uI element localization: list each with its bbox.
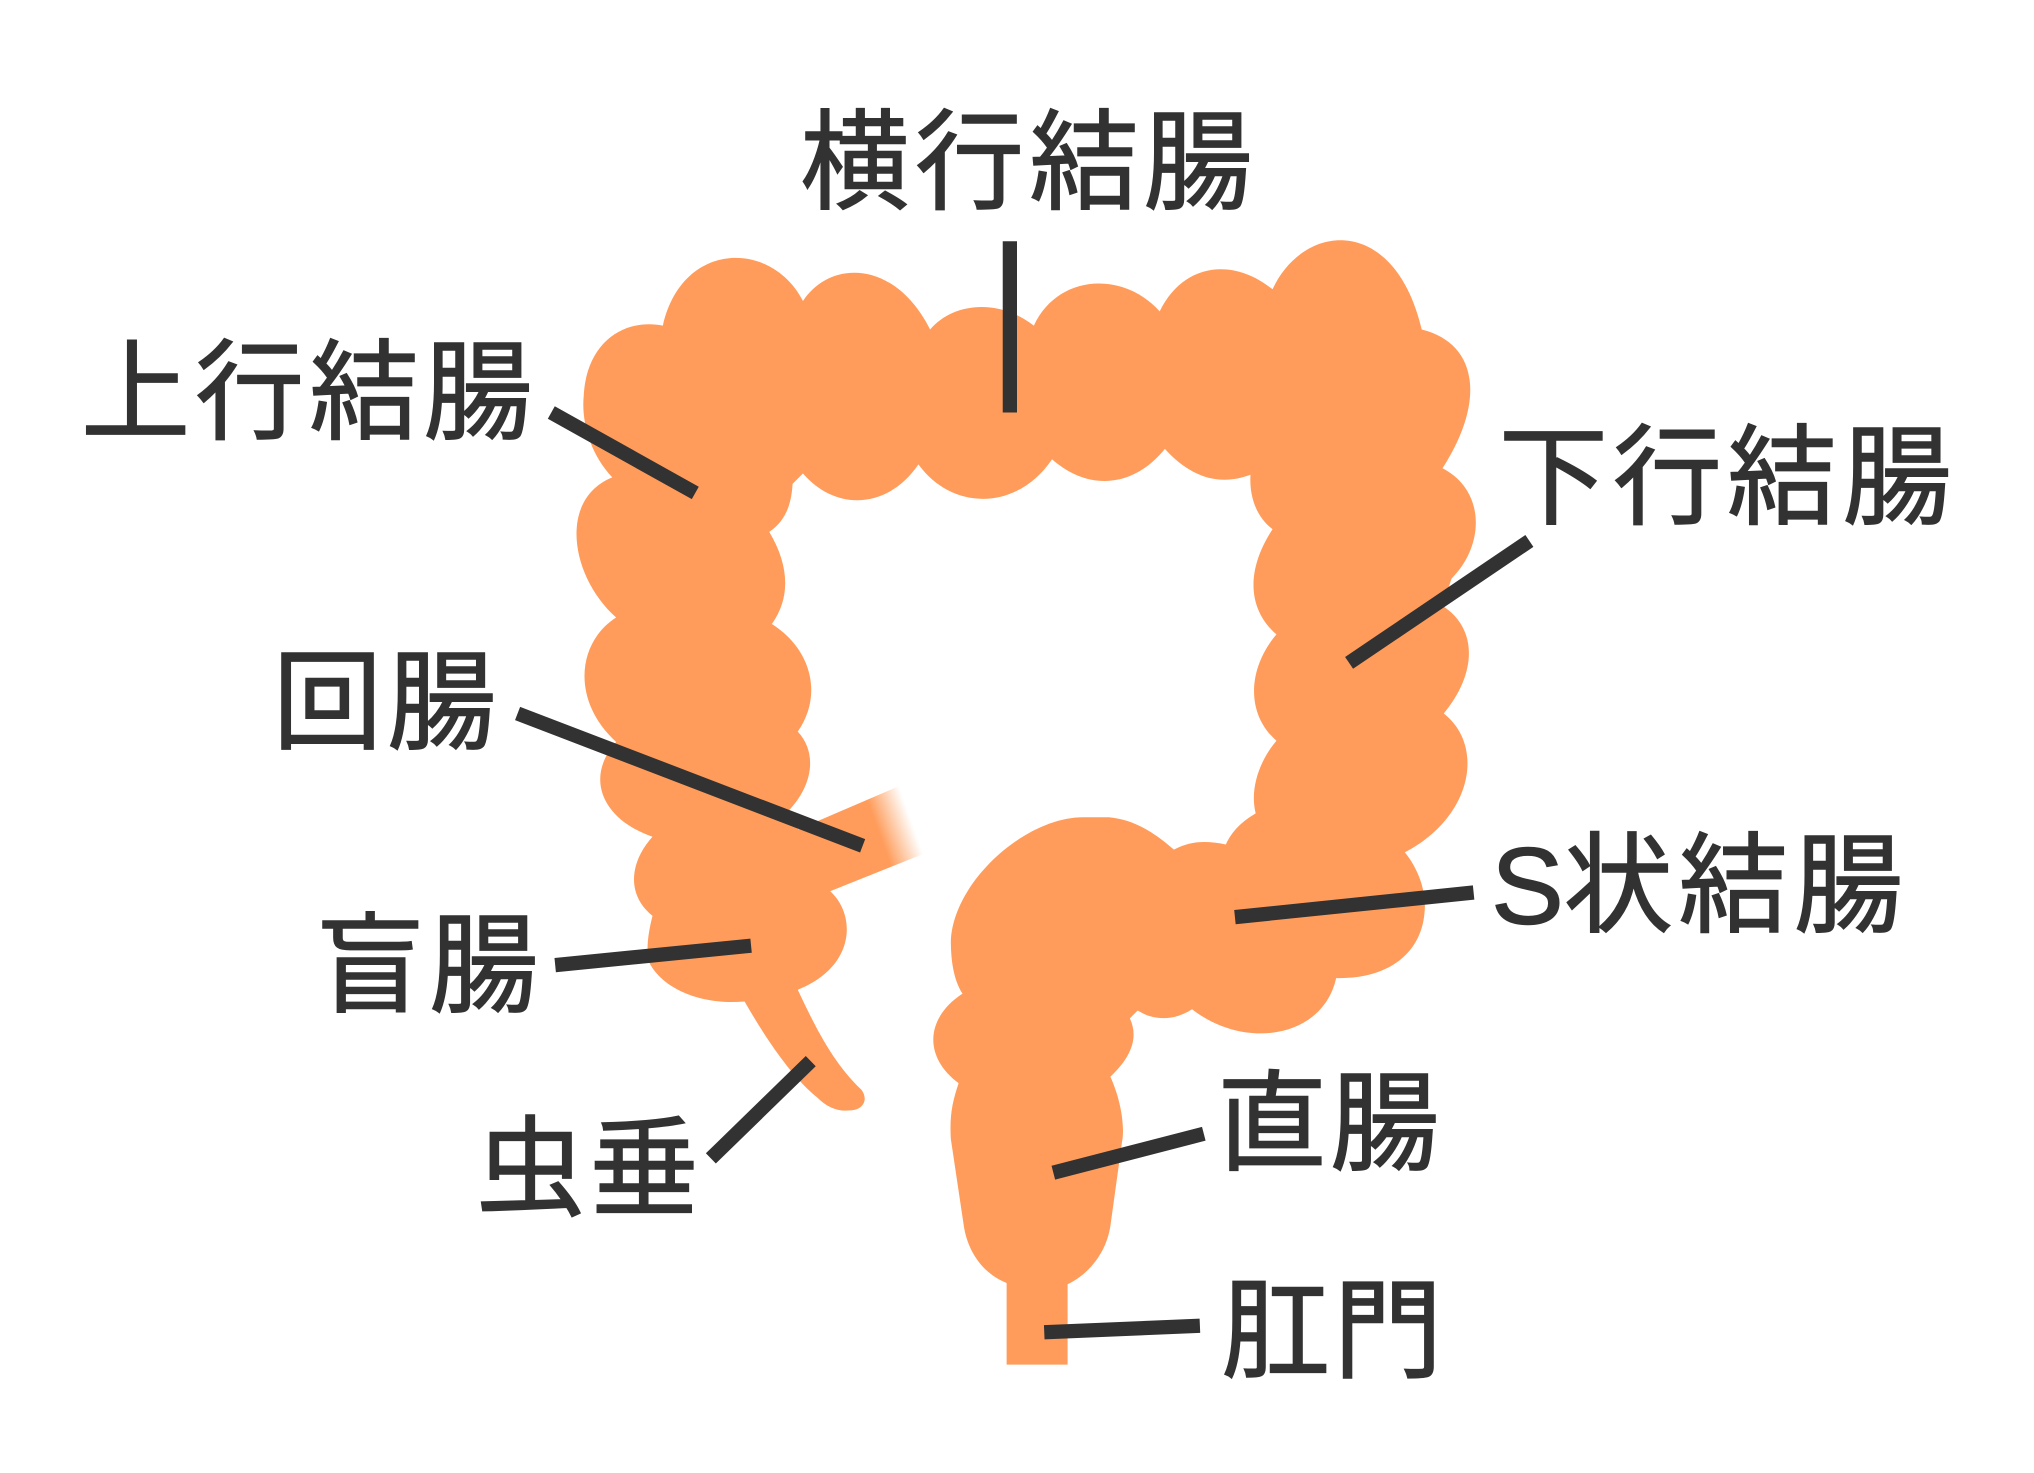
- label: ascending colon: [81, 333, 695, 493]
- label: rectum: 直腸: [1217, 1064, 1439, 1186]
- colon body: [577, 240, 1476, 1365]
- ileum tube: [778, 782, 940, 902]
- label: sigmoid colon: S状結腸: [1491, 826, 1903, 948]
- label: descending colon: [1349, 418, 1952, 663]
- label: ascending colon: 上行結腸: [81, 333, 533, 455]
- label: rectum: [1053, 1064, 1439, 1186]
- label: ileum: 回腸: [273, 643, 496, 765]
- label: appendix: 虫垂: [476, 1109, 699, 1231]
- label: appendix: [476, 1061, 811, 1231]
- label: cecum: [316, 905, 751, 1027]
- label: transverse colon: 横行結腸: [800, 102, 1252, 224]
- label: anus: [1044, 1271, 1442, 1393]
- label: cecum: 盲腸: [316, 905, 538, 1027]
- label: sigmoid colon: [1235, 826, 1903, 948]
- label: anus: 肛門: [1221, 1271, 1442, 1393]
- label: descending colon: 下行結腸: [1499, 418, 1952, 540]
- label: ileum: [273, 643, 863, 846]
